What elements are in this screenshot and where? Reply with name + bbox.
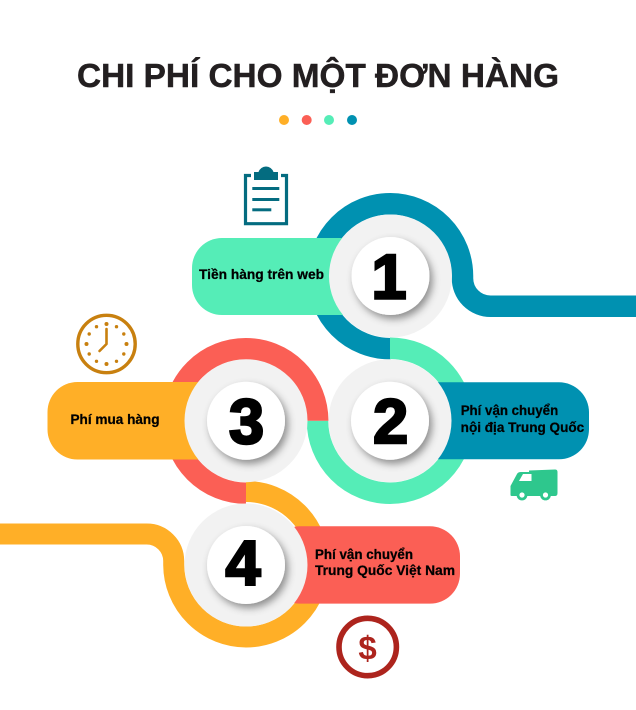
- number 1: 1: [371, 242, 407, 312]
- pill: step 4 label: [270, 526, 460, 604]
- label: step 1: Tiền hàng trên web: [199, 267, 324, 282]
- pill: step 3 label: [48, 382, 238, 460]
- icon: dollar coin: $: [358, 630, 377, 666]
- number 4: 4: [225, 529, 261, 599]
- number disc: step 3: [207, 382, 285, 460]
- number disc: step 4: [207, 526, 285, 604]
- pill: step 1 label: [192, 238, 382, 315]
- icon: dollar coin: [339, 618, 396, 676]
- step 1: [192, 214, 452, 338]
- disc: step 1: [329, 214, 452, 338]
- path: ribbon ring 4: [0, 492, 319, 637]
- disc: step 3: [184, 359, 308, 482]
- path: ribbon ring 1: [318, 204, 636, 349]
- path: ribbon ring 3: [174, 349, 318, 493]
- number disc: step 1: [352, 237, 430, 315]
- label: step 2: nội địa Trung Quốc: [461, 420, 585, 435]
- icon: clock: [78, 315, 135, 373]
- icon: delivery truck: [510, 470, 558, 499]
- step 3: [48, 359, 308, 482]
- disc: step 2: [328, 359, 452, 482]
- label: step 3: Phí mua hàng: [70, 412, 160, 427]
- label: step 4: Phí vận chuyển: [315, 547, 413, 562]
- decorative dots row: [279, 115, 357, 125]
- pill: step 2 label: [399, 382, 589, 459]
- label: step 4: Trung Quốc Việt Nam: [315, 563, 455, 578]
- number disc: step 2: [351, 382, 429, 460]
- step 2: [328, 359, 589, 482]
- icon: clipboard: [246, 166, 286, 224]
- label: step 2: Phí vận chuyển: [461, 403, 558, 418]
- path: ribbon ring 2: [318, 348, 462, 493]
- number 3: 3: [229, 388, 264, 458]
- step 4: [184, 504, 460, 626]
- disc: step 4: [184, 504, 308, 626]
- title: CHI PHÍ CHO MỘT ĐƠN HÀNG: [77, 56, 559, 94]
- number 2: 2: [373, 387, 408, 457]
